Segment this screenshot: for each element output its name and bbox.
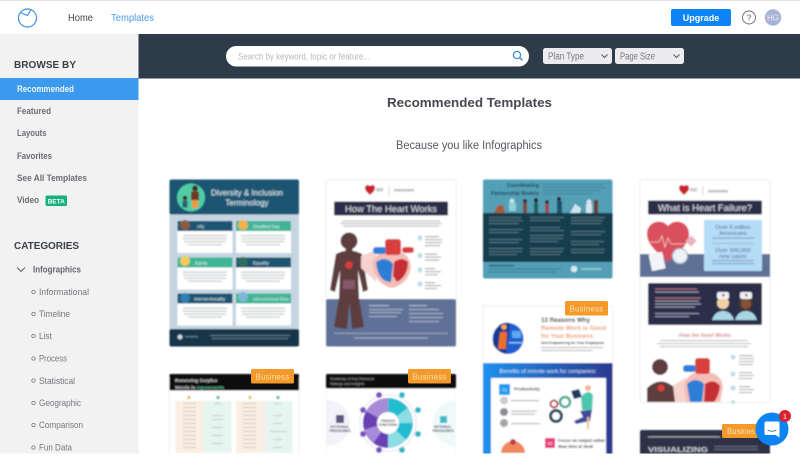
wheel chart: FINANCE — [381, 419, 395, 423]
subcategory list: Statistical — [39, 376, 75, 387]
upgrade button: Upgrade — [683, 13, 719, 23]
upgrade button — [671, 9, 731, 26]
term panels: Intersectionality — [194, 296, 226, 301]
illustration: worker in circle — [492, 323, 524, 354]
active item: recommended: Recommended — [17, 84, 74, 95]
wheel chart — [360, 392, 421, 453]
statistics box: Over 6 million — [715, 225, 751, 231]
category: infographics — [17, 264, 81, 276]
word table — [176, 396, 292, 453]
template card: visualizing — [640, 430, 770, 457]
blue benefits panel — [483, 363, 612, 457]
card title — [211, 188, 283, 208]
term panels: Equity — [195, 260, 208, 265]
browse menu items: Layouts — [17, 128, 46, 139]
card heading: Removing Surplus — [175, 378, 218, 384]
business badge: wheel card — [408, 369, 451, 384]
subcategory list: Process — [39, 354, 67, 364]
card heading — [330, 377, 374, 386]
side circles: INTERNAL — [434, 425, 453, 429]
logo row — [365, 185, 414, 195]
business badge: remote work card — [565, 301, 608, 316]
term panels — [178, 220, 291, 326]
heading: browse by: BROWSE BY — [14, 60, 76, 71]
dropdown: plan type — [543, 48, 612, 64]
header description — [543, 184, 606, 194]
card heading — [175, 378, 225, 391]
dropdown: plan type: Plan Type — [548, 52, 584, 62]
dark info panel — [648, 283, 762, 325]
illustration: heart with clipboard and clock — [647, 222, 697, 271]
category: infographics: Infographics — [33, 264, 81, 276]
template card: how the heart works — [326, 180, 456, 346]
browse menu items: Video — [17, 195, 39, 206]
intro text — [657, 340, 751, 347]
second benefit row: #2 — [547, 441, 553, 446]
template card: removing surplus words — [170, 374, 299, 457]
business badge: visualizing card — [722, 424, 758, 438]
term panels: Equality — [253, 260, 270, 265]
browse menu items: See All Templates — [17, 173, 87, 184]
card footer — [489, 265, 601, 273]
card title: Terminology — [225, 198, 269, 208]
card heading — [491, 183, 539, 197]
heart part labels — [417, 235, 442, 289]
illustration: heart anatomy — [361, 239, 414, 288]
term panels: Unconscious Bias — [253, 296, 290, 301]
title bar: How The Heart Works — [345, 204, 437, 215]
blue benefits panel: Benefits of remote work for companies: — [500, 369, 597, 375]
subcategory list: Geographic — [39, 398, 81, 409]
statistics box — [704, 220, 762, 271]
illustration: nurses — [712, 292, 757, 320]
icon: help — [742, 11, 756, 24]
statistics box: Americans — [719, 231, 747, 237]
second benefit row: Focus on output rather — [558, 438, 605, 443]
side circles: EXTERNAL — [331, 425, 350, 429]
productivity row: Productivity — [514, 386, 541, 392]
term panels: Disabled Day — [253, 224, 281, 229]
subcategory list: Comparison — [39, 420, 83, 431]
user avatar — [765, 9, 781, 26]
second benefit row: than time at desk — [558, 444, 594, 449]
statistics box: Over 900,000 — [715, 248, 751, 254]
title bar: What is Heart Failure? — [658, 203, 752, 214]
text columns — [489, 217, 605, 255]
subheading: how the heart works: How the Heart Works — [679, 333, 731, 339]
template card: wheel diagram — [324, 372, 458, 454]
bottom page fade — [0, 454, 800, 457]
subcategory list: Timeline — [39, 309, 70, 320]
dropdown: page size — [615, 48, 684, 64]
notification badge: 1 — [783, 412, 787, 421]
card heading: Partnership Models — [491, 191, 539, 197]
subcategory list: Fun Data — [39, 442, 73, 454]
template card: coordinating partnership models — [483, 180, 612, 278]
section title: Recommended Templates — [387, 96, 552, 110]
business badge: remote work card: Business — [569, 304, 604, 314]
search box: Search by keyword, topic or feature... — [238, 52, 370, 62]
heart part labels — [730, 354, 754, 404]
card headline — [541, 317, 606, 345]
user avatar: HG — [767, 14, 779, 22]
logo row — [679, 185, 728, 195]
card footer details — [178, 334, 290, 340]
beta badge — [46, 196, 67, 206]
beta badge: BETA — [48, 198, 65, 206]
search box — [226, 46, 529, 66]
browse menu items: Featured — [17, 106, 51, 117]
card headline: for Your Business — [541, 333, 593, 340]
blue footer text — [334, 305, 448, 339]
sidebar — [0, 34, 138, 454]
card heading: Words in Agreements — [175, 385, 225, 391]
subcategory list: List — [39, 331, 52, 342]
template card: diversity and inclusion terminology — [170, 180, 299, 346]
card headline: 13 Reasons Why — [541, 317, 590, 324]
second benefit row — [501, 438, 605, 453]
card heading: Summary of Key Financial — [330, 377, 374, 381]
browse menu items — [17, 106, 87, 206]
card heading: Ratings and Insights — [330, 382, 365, 386]
active item: recommended — [0, 78, 138, 100]
title bar — [334, 202, 448, 216]
statistics box: new cases — [719, 254, 747, 260]
illustration: row of people — [494, 197, 598, 213]
template card: what is heart failure — [640, 180, 770, 404]
template card: remote work — [483, 306, 612, 457]
intro text — [340, 220, 442, 227]
subcategory list: Informational — [39, 287, 89, 298]
card heading: Coordinating — [507, 183, 539, 189]
illustration: figure and heart — [647, 358, 723, 402]
side circles: PRESSURES — [432, 429, 454, 433]
template card: visualizing: VISUALIZING — [648, 445, 708, 454]
productivity row: #1 — [502, 388, 507, 392]
business badge: surplus words card — [251, 369, 294, 384]
illustration: people in circle — [177, 184, 205, 212]
nav link: templates: Templates — [111, 12, 154, 24]
benefit icons — [500, 396, 540, 427]
wheel chart: FUNCTIONS — [379, 423, 397, 427]
slate band — [640, 254, 770, 277]
productivity row — [499, 384, 541, 395]
card title: Diversity & Inclusion — [211, 188, 283, 198]
term panels: Ally — [197, 224, 205, 229]
card headline: And Empowering for Your Employees — [541, 340, 605, 345]
browse menu items: Favorites — [17, 151, 52, 162]
subcategory list — [32, 287, 89, 454]
top navigation bar — [0, 0, 800, 34]
card headline: Remote Work is Good — [541, 325, 606, 332]
side circles — [327, 400, 456, 446]
icon: help: ? — [747, 12, 752, 22]
business badge: visualizing card: Busines — [727, 427, 755, 436]
dropdown: page size: Page Size — [620, 52, 655, 62]
side circles: PRESSURES — [329, 429, 351, 433]
title bar — [648, 200, 762, 214]
headline note — [541, 347, 603, 351]
search header band — [138, 34, 800, 78]
business badge: surplus words card: Business — [255, 372, 290, 382]
illustration: gears and person — [550, 385, 593, 429]
section subtitle: Because you like Infographics — [396, 140, 542, 152]
illustration: human figure — [330, 232, 368, 329]
icon: logo — [18, 9, 36, 27]
nav link: home: Home — [68, 12, 93, 24]
business badge: wheel card: Business — [412, 372, 447, 382]
heading: categories: CATEGORIES — [14, 241, 79, 252]
